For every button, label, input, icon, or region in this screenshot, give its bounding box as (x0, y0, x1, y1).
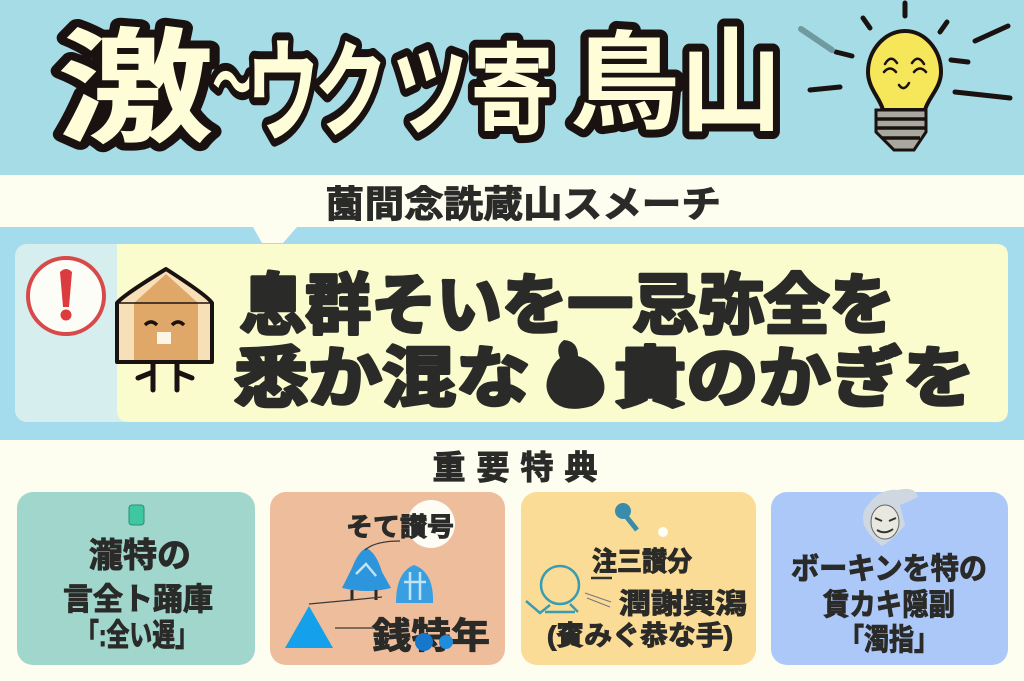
icon: light bulb (801, 3, 1010, 150)
panel: card 1: 「:全い遅」 (76, 618, 198, 653)
icon: exclamation mark (28, 258, 104, 334)
panel: card 4 (771, 489, 1008, 665)
panel: card 1 (17, 492, 255, 665)
icon: black blob (546, 340, 604, 409)
title (56, 17, 782, 159)
headline: 貴のかぎを (614, 341, 975, 415)
title: ク (314, 34, 388, 151)
panel: card 3: (賓みぐ恭な手) (547, 621, 733, 651)
subtitle: 薗間念詵蔵山スメーチ (325, 184, 721, 225)
headline (234, 268, 975, 415)
panel: card 4: 賃カキ隠副 (823, 589, 955, 622)
diagram: blue shapes (285, 541, 453, 651)
title: ～ (212, 45, 256, 123)
icon: box mascot (117, 269, 212, 390)
panel: card 4: ボーキンを特の (791, 553, 987, 586)
icon: round character (526, 566, 612, 613)
icon: blue key (615, 503, 668, 537)
panel: alert band (0, 227, 1024, 440)
title: 鳥 (570, 25, 680, 143)
title: 寄 (470, 36, 554, 148)
panel: card 3 (521, 492, 756, 665)
title: 激 (56, 20, 214, 159)
header band (0, 0, 1024, 175)
panel: card 2: そて讃号 (346, 512, 454, 542)
panel: card 2: 銭特年 (372, 615, 490, 656)
headline: 悉か混な (234, 341, 530, 415)
headline: 息群そいを一忌弥全を (240, 268, 895, 342)
icon: grey face (863, 489, 918, 546)
panel: card 1: 言全ト踊庫 (63, 582, 213, 617)
title: ツ (392, 38, 468, 150)
title: ウ (246, 31, 320, 156)
panel: card 4: 「濁指」 (839, 624, 939, 657)
section heading: 重 要 特 典 (432, 449, 598, 486)
icon: green tag (129, 505, 144, 525)
title: 山 (680, 17, 782, 147)
panel: card 3: 潤謝興潟 (619, 588, 747, 619)
panel: card 2 (270, 492, 505, 665)
panel: card 1: 瀧特の (89, 537, 191, 575)
panel: card 3: 注三讃分 (592, 547, 692, 577)
